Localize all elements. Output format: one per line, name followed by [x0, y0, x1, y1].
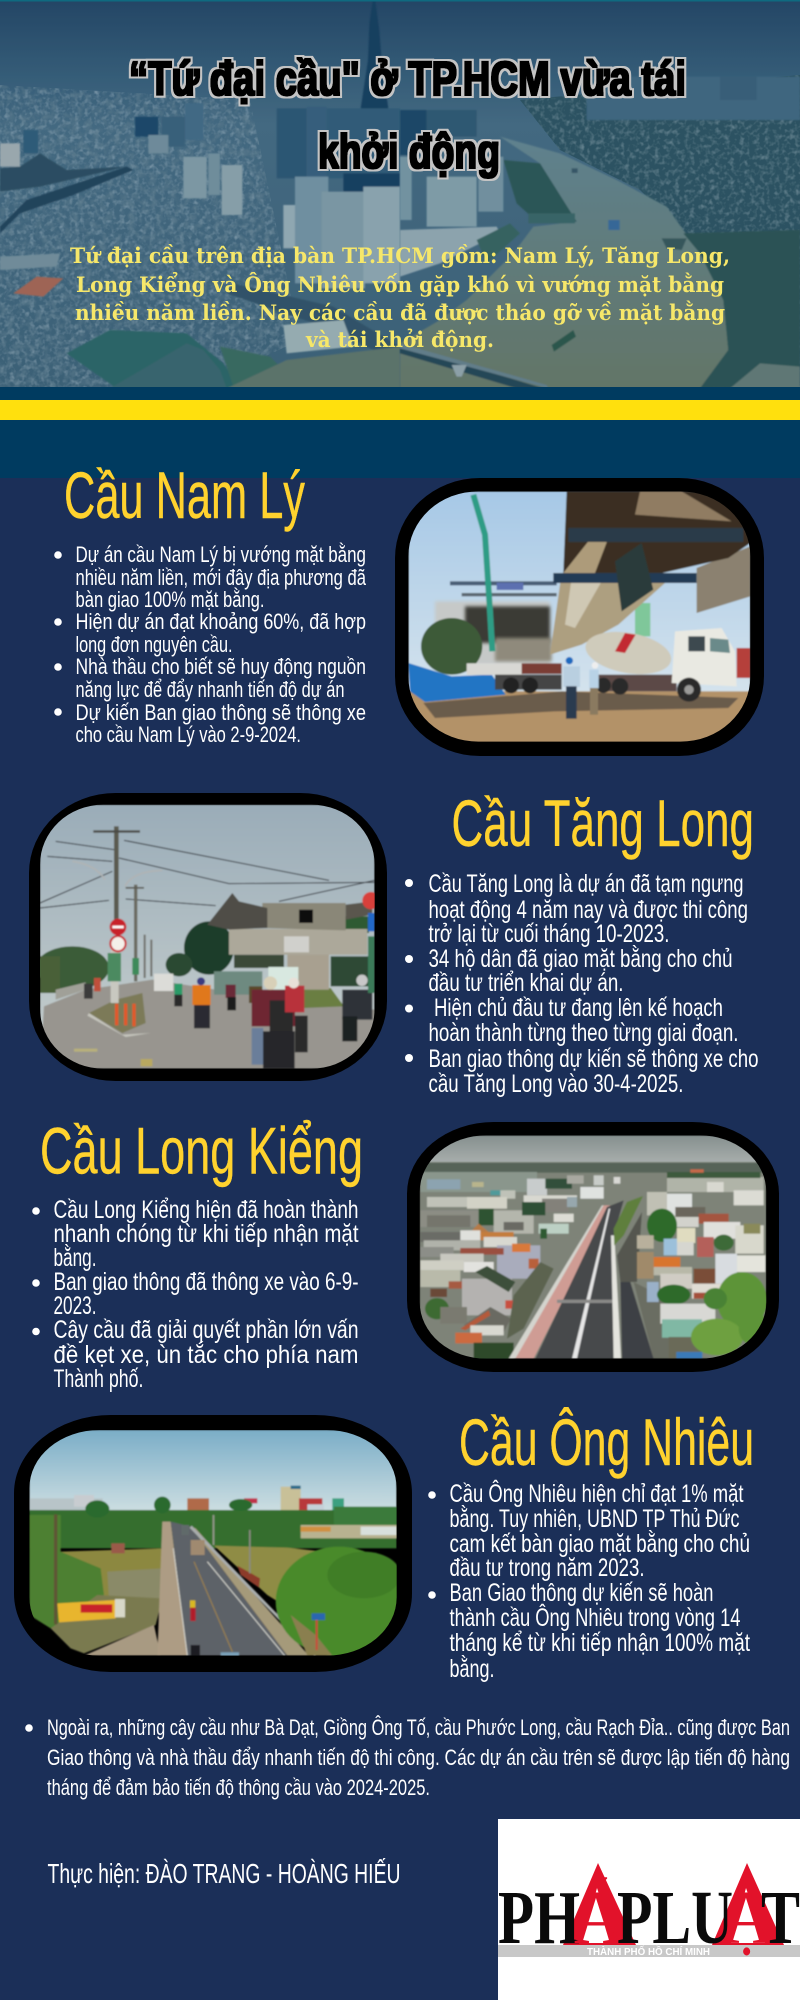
bullet list: Long Kiểng: Cầu Long Kiểng hiện đã hoàn thành [54, 1196, 358, 1224]
bullet list: Tăng Long: cầu Tăng Long vào 30-4-2025. [428, 1070, 684, 1098]
logo: Pháp Luật [498, 1819, 800, 2000]
logo: Pháp Luật: PLU [617, 1876, 733, 1960]
logo: Pháp Luật: PH [498, 1876, 580, 1960]
credit line: Thực hiện: ĐÀO TRANG - HOÀNG HIẾU [48, 1858, 400, 1889]
heading: Cầu Nam Lý: Cầu Nam Lý [64, 458, 305, 532]
bullet list: Long Kiểng: nhanh chóng từ khi tiếp nhận mặt [54, 1220, 359, 1248]
bullet list: Ông Nhiêu: Ban Giao thông dự kiến sẽ hoàn [450, 1579, 714, 1607]
header band with yellow stripe [0, 387, 800, 478]
bullet list: Long Kiểng: đề kẹt xe, ùn tắc cho phía nam [54, 1340, 358, 1369]
intro text: Tứ đại cầu trên địa bàn TP.HCM gồm: Nam Lý, Tăng Long, [70, 243, 730, 269]
closing note [25, 1715, 790, 1800]
bullet list: Tăng Long [405, 870, 758, 1098]
intro text: Long Kiểng và Ông Nhiêu vốn gặp khó vì vướng mặt bằng [76, 270, 724, 298]
panel: Cầu Nam Lý [54, 458, 764, 756]
bullet list: Long Kiểng: 2023. [54, 1292, 96, 1320]
bullet list: Nam Lý: Dự kiến Ban giao thông sẽ thông xe [76, 700, 366, 725]
bullet list: Ông Nhiêu: đầu tư trong năm 2023. [450, 1554, 644, 1582]
hero panel: aerial city photo [0, 0, 800, 388]
bullet list: Nam Lý: Dự án cầu Nam Lý bị vướng mặt bằng [76, 542, 366, 567]
bullet list: Long Kiểng [32, 1196, 359, 1393]
intro text [70, 243, 730, 353]
panel: Cầu Ông Nhiêu [14, 1405, 754, 1683]
bullet list: Nam Lý: nhiều năm liền, mới đây địa phương đã [76, 565, 367, 590]
bullet list: Long Kiểng: bằng. [54, 1243, 96, 1272]
logo: Pháp Luật: Á [574, 1876, 622, 1960]
bullet list: Nam Lý: Nhà thầu cho biết sẽ huy động nguồn [76, 654, 366, 679]
photo: Long Kiểng new overpass [407, 1122, 779, 1372]
bullet list: Nam Lý: Hiện dự án đạt khoảng 60%, đã hợp [76, 609, 366, 634]
title: khởi động [318, 126, 500, 179]
logo: Pháp Luật: THÀNH PHỐ HỒ CHÍ MINH [587, 1944, 710, 1958]
bullet list: Tăng Long: trở lại từ cuối tháng 10-2023. [428, 920, 670, 948]
logo: Pháp Luật: Ậ [724, 1876, 772, 1960]
bullet list: Nam Lý: bàn giao 100% mặt bằng. [76, 587, 264, 612]
bullet list: Ông Nhiêu: bằng. [450, 1654, 494, 1683]
bullet list: Long Kiểng: Ban giao thông đã thông xe vào 6-9- [54, 1268, 358, 1296]
bullet list: Long Kiểng: Cây cầu đã giải quyết phần lớn vấn [54, 1316, 358, 1344]
bullet list: Nam Lý [54, 542, 367, 747]
bullet list: Long Kiểng: Thành phố. [54, 1365, 144, 1393]
intro text: và tái khởi động. [305, 327, 494, 353]
intro text: nhiều năm liền. Nay các cầu đã được tháo gỡ về mặt bằng [75, 299, 725, 326]
photo: Tăng Long unfinished viaduct [29, 793, 387, 1081]
closing note: tháng để đảm bảo tiến độ thông cầu vào 2024-2025. [47, 1775, 430, 1800]
title [129, 53, 686, 179]
heading: Cầu Long Kiểng: Cầu Long Kiểng [40, 1114, 363, 1188]
bullet list: Nam Lý: long đơn nguyên cầu. [76, 632, 232, 657]
panel: Cầu Long Kiểng [32, 1114, 779, 1393]
bullet list: Tăng Long: đầu tư triển khai dự án. [428, 969, 624, 997]
bullet list: Ông Nhiêu [428, 1479, 750, 1683]
photo: Nam Lý construction site [395, 478, 764, 756]
photo: Ông Nhiêu bridge over river [14, 1415, 412, 1672]
bullet list: Nam Lý: cho cầu Nam Lý vào 2-9-2024. [76, 722, 301, 747]
panel: Cầu Tăng Long [29, 786, 758, 1098]
bullet list: Nam Lý: năng lực để đẩy nhanh tiến độ dự án [76, 677, 344, 702]
